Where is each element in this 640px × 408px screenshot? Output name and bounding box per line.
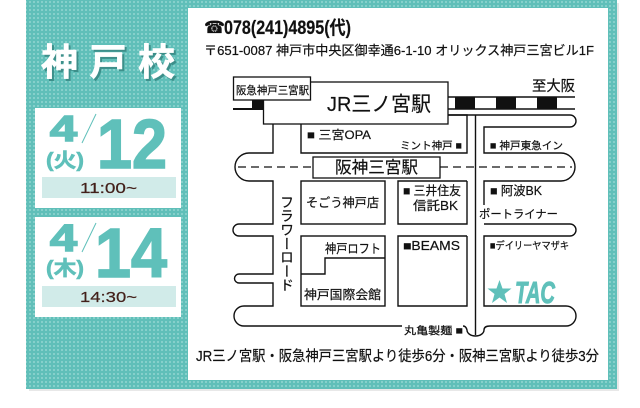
weekday: (火) — [46, 150, 84, 172]
map — [233, 77, 576, 337]
date slash — [82, 223, 96, 252]
map labels: 信託BK — [413, 198, 459, 213]
address: 〒651-0087 神戸市中央区御幸通6-1-10 オリックス神戸三宮ビル1F — [204, 43, 594, 58]
map labels: ■ 三井住友 — [403, 184, 461, 198]
date slash — [82, 114, 96, 143]
TAC logo: TAC — [515, 275, 555, 310]
map labels: ポートライナー — [479, 208, 558, 221]
Hanshin station: 阪神三宮駅 — [335, 158, 418, 177]
white map panel — [188, 8, 608, 380]
month 4: 4 — [50, 218, 77, 260]
map labels — [304, 127, 569, 337]
date card: April 12 — [35, 105, 181, 208]
map labels: ■ 三宮OPA — [307, 127, 371, 142]
map labels: 神戸国際会館 — [304, 287, 381, 302]
time bar — [42, 177, 176, 198]
road network — [233, 115, 576, 336]
school title: 神戸校 — [43, 44, 177, 85]
map labels: ■BEAMS — [403, 239, 460, 253]
Hankyu station: 阪急神戸三宮駅 — [236, 83, 309, 97]
time bar — [42, 286, 176, 307]
date card: April 14 — [35, 214, 181, 317]
month 4: 4 — [50, 108, 77, 149]
phone number: 078(241)4895(代) — [224, 18, 351, 39]
Flower Road label: フラワーロード — [279, 195, 295, 292]
map labels: ■ 阿波BK — [490, 184, 543, 198]
map labels: 神戸ロフト — [325, 241, 381, 256]
school title: 神戸校 — [41, 42, 175, 83]
time: 14:30~ — [80, 289, 137, 306]
time: 11:00~ — [80, 180, 137, 197]
JR station: JR三ノ宮駅 — [327, 93, 431, 116]
TAC logo — [488, 275, 555, 310]
map labels: ミント神戸 ■ — [400, 139, 462, 152]
direction label: 至大阪 — [532, 78, 575, 95]
map labels: ■デイリーヤマザキ — [490, 239, 569, 252]
phone icon: ☎ — [204, 18, 225, 38]
map labels: ■ 神戸東急イン — [490, 139, 563, 152]
map labels: 丸亀製麺 ■ — [404, 324, 463, 337]
day 12: 12 — [97, 105, 167, 183]
Hankyu station — [234, 77, 310, 100]
JR station — [264, 82, 448, 124]
map labels: そごう神戸店 — [306, 195, 379, 210]
railway tracks — [233, 97, 575, 109]
day 14: 14 — [95, 214, 167, 292]
Hanshin station — [313, 157, 440, 178]
access note: JR三ノ宮駅・阪急神戸三宮駅より徒歩6分・阪神三宮駅より徒歩3分 — [196, 348, 599, 365]
weekday: (木) — [46, 257, 84, 280]
